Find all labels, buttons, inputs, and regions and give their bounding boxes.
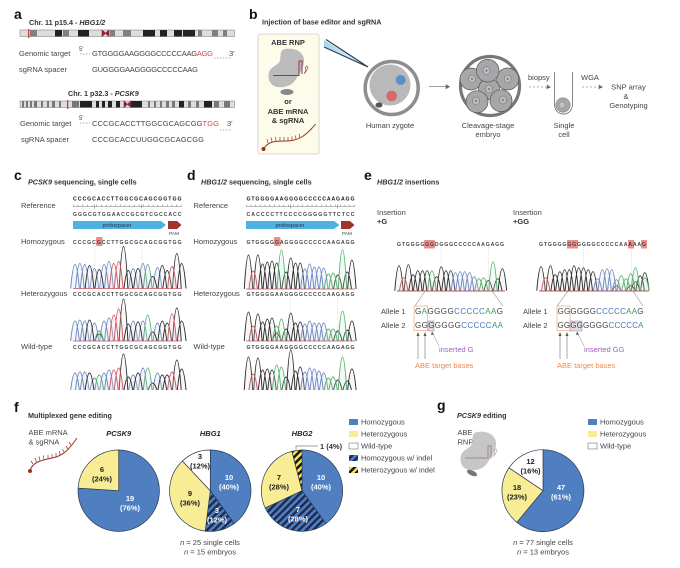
legend: f: Wild-type <box>361 442 392 450</box>
wild-type trace <box>244 345 356 390</box>
pie chart: HBG1: (40%) <box>219 482 240 492</box>
pie chart: HBG2: (28%) <box>269 482 290 492</box>
caption: f sample sizes: n = 15 embryos <box>184 548 236 556</box>
pie chart: PCSK9: PCSK9 <box>106 429 132 438</box>
text: genomic target row, HBG: GTGGGGAAGGGGCCCCCAAGAGG <box>92 49 213 58</box>
label b: b <box>249 6 258 22</box>
pie chart: PCSK9 editing: 18 <box>513 483 521 492</box>
pie chart: PCSK9: (76%) <box>120 504 141 512</box>
caption: f sample sizes: n = 25 single cells <box>180 538 240 547</box>
panel c: PCSK9 sequencing <box>14 167 186 390</box>
caption: g sample sizes: n = 77 single cells <box>513 538 573 547</box>
insertion +GG column: Insertion <box>513 208 542 217</box>
pie chart: HBG2 <box>261 429 343 531</box>
pie chart: HBG2: 7 <box>296 505 300 514</box>
heterozygous trace <box>244 292 356 341</box>
legend: g <box>588 418 647 450</box>
label e: e <box>364 167 372 183</box>
icon: human zygote <box>365 62 418 114</box>
insertion +GG column: +GG <box>513 217 529 226</box>
homozygous trace <box>244 237 356 289</box>
panel g: PCSK9 editing <box>437 397 647 556</box>
pie chart: HBG2: (40%) <box>311 482 332 492</box>
legend: f: Homozygous <box>361 418 405 426</box>
row labels: Wild-type <box>194 342 225 351</box>
row labels: Reference <box>194 201 228 210</box>
text: genomic target row, PCSK9: 5' <box>79 116 83 122</box>
row labels: Homozygous <box>21 237 65 246</box>
insertion +GG column: inserted GG <box>584 345 625 354</box>
reference sequence <box>73 196 182 218</box>
box: ABE reagents <box>258 34 319 154</box>
pie chart: HBG2: (28%) <box>288 514 309 524</box>
text: genomic target row, PCSK9: CCCGCACCTTGGCGCAGCGGTGG <box>92 119 219 128</box>
pie chart: HBG1: 3 <box>215 506 219 515</box>
pie chart: HBG2: 1 (4%) <box>320 442 343 451</box>
insertion +G column <box>377 208 507 370</box>
insertion +GG column: GTGGGGGGGGGGCCCCCAAAAAG <box>539 242 646 248</box>
wild-type trace <box>71 345 186 390</box>
PAM arrow: PAM <box>342 231 352 237</box>
pie chart: PCSK9 editing: (16%) <box>520 466 541 476</box>
insertion +GG column: GGGGGGCCCCCAAG <box>558 307 644 316</box>
icon: mRNA strand <box>262 124 316 151</box>
text: genomic target row, PCSK9: Genomic target <box>20 119 72 128</box>
protospacer arrow <box>73 221 166 229</box>
legend: f: Heterozygous <box>361 430 408 438</box>
panel a: genomic targets <box>14 6 235 144</box>
pie chart: HBG1: HBG1 <box>200 429 221 438</box>
pie chart: HBG1: 10 <box>225 473 233 482</box>
protospacer arrow <box>246 221 340 229</box>
reference sequence: GGGCGTGGAACCGCGTCGCCACC <box>73 212 182 218</box>
insertion +G column: Allele 1 <box>381 307 406 316</box>
pie chart: PCSK9 editing: (23%) <box>507 492 528 502</box>
insertion +GG column: GGGGGGGGCCCCCA <box>558 321 644 330</box>
insertion +G column: Allele 2 <box>381 321 406 330</box>
reference sequence: CCCGCACCTTGGCGCAGCGGTGG <box>73 196 182 202</box>
text: genomic target row, HBG: 3' <box>229 49 235 58</box>
PAM arrow <box>341 221 354 237</box>
chromatogram +GG <box>537 266 649 291</box>
pie chart: HBG2: HBG2 <box>292 429 313 438</box>
text: sgRNA spacer row, HBG: GUGGGGAAGGGGCCCCCAAG <box>92 65 198 74</box>
text: genomic target row, HBG: Genomic target <box>19 49 71 58</box>
heading: HBG1/2 locus: Chr. 11 p15.4 - HBG1/2 <box>29 18 105 27</box>
legend: f: Homozygous w/ indel <box>361 454 433 462</box>
caption: embryo: embryo <box>475 130 501 139</box>
insertion +G column: GGGGGGGCCCCCAA <box>415 321 504 330</box>
wild-type trace: GTGGGGAAGGGGCCCCCAAGAGG <box>246 345 354 351</box>
insertion +GG column: ABE target bases <box>557 361 616 370</box>
pie chart: HBG1: (36%) <box>180 498 201 508</box>
ideogram: chromosome 1 <box>20 100 234 109</box>
text: sgRNA spacer row, PCSK9: sgRNA spacer <box>21 135 69 144</box>
panel e: HBG1/2 insertions <box>364 167 649 370</box>
panel d: HBG1/2 sequencing <box>187 167 356 390</box>
caption: g sample sizes: n = 13 embryos <box>517 548 569 556</box>
text: sgRNA spacer row, HBG <box>19 65 198 74</box>
text: SNP array and genotyping: & <box>623 92 629 101</box>
insertion +GG column: Allele 2 <box>523 321 548 330</box>
pie chart: HBG2: 7 <box>277 473 281 482</box>
label: WGA: WGA <box>581 73 599 82</box>
icon: single cell tube <box>554 72 572 114</box>
label f: f <box>14 399 19 415</box>
icon: RNP complex <box>460 432 497 478</box>
row labels: Wild-type <box>21 342 52 351</box>
heading: PCSK9 locus: Chr. 1 p32.3 - PCSK9 <box>68 89 139 98</box>
panel f: multiplexed gene editing <box>14 399 435 556</box>
legend: f: Heterozygous w/ indel <box>361 466 435 474</box>
pie chart: PCSK9: 19 <box>126 494 134 503</box>
arrow: biopsy <box>529 85 550 89</box>
label d: d <box>187 167 196 183</box>
chromatogram +G <box>395 262 507 291</box>
icon: cleavage-stage embryo <box>460 56 520 116</box>
pie chart: HBG1 <box>170 429 251 531</box>
homozygous trace: GTGGGGGAGGGGCCCCCAAGAGG <box>246 240 354 246</box>
label g: g <box>437 397 446 413</box>
heading: PCSK9 editing <box>457 411 507 420</box>
heading: HBG1/2 insertions <box>377 178 439 186</box>
legend: g: Homozygous <box>600 418 644 426</box>
heading: Injection of base editor and sgRNA <box>262 18 381 26</box>
text: sgRNA spacer row, PCSK9 <box>21 135 204 144</box>
heterozygous trace: GTGGGGAAGGGGCCCCCAAGAGG <box>246 292 354 298</box>
text: sgRNA spacer row, PCSK9: CCCGCACCUUGGCGCAGCGG <box>92 135 204 144</box>
pie chart: HBG1: (12%) <box>190 462 211 470</box>
pie chart: HBG2: 10 <box>317 473 325 482</box>
insertion +G column: GTGGGGGGDGGGCCCCCAAGAGG <box>397 242 504 248</box>
legend: g: Wild-type <box>600 442 631 450</box>
label: biopsy: biopsy <box>528 73 550 82</box>
text: SNP array and genotyping: Genotyping <box>609 101 648 110</box>
ideogram: chromosome 11 <box>20 29 234 38</box>
row labels: Heterozygous <box>194 289 240 298</box>
pie chart: PCSK9 <box>78 429 159 531</box>
box: ABE reagents: ABE RNP <box>271 38 305 47</box>
arrow: zygote to embryo <box>429 85 450 89</box>
row labels: Heterozygous <box>21 289 68 298</box>
insertion +G column: Insertion <box>377 208 406 217</box>
text: SNP array and genotyping: SNP array <box>611 82 646 92</box>
insertion +GG column: Allele 1 <box>523 307 548 316</box>
reference sequence: CACCCCTTCCCCGGGGGTTCTCC <box>246 212 355 218</box>
text: ABE RNP: ABE <box>458 428 473 437</box>
pie chart: PCSK9 editing <box>502 450 584 532</box>
legend: g: Heterozygous <box>600 430 647 438</box>
arrow: WGA <box>582 85 602 89</box>
pie chart: PCSK9: (24%) <box>92 474 113 484</box>
text: genomic target row, HBG <box>19 47 235 58</box>
panel b: injection workflow <box>249 6 648 154</box>
pie chart: HBG1: 3 <box>198 452 202 461</box>
pie chart: PCSK9 editing: 12 <box>526 457 535 466</box>
heterozygous trace: CCCGCACCTTGGCGCAGCGGTGG <box>73 292 182 298</box>
icon: injection needle <box>324 40 368 67</box>
box: ABE reagents: or <box>284 97 292 106</box>
box: ABE reagents: & sgRNA <box>272 116 305 125</box>
PAM arrow <box>168 221 182 237</box>
text: ABE RNP: RNP <box>458 438 473 446</box>
caption: single cell: Single <box>554 121 574 130</box>
heading: HBG1/2 sequencing, single cells <box>201 178 312 186</box>
heterozygous trace <box>71 292 186 341</box>
text: genomic target row, PCSK9 <box>20 116 233 130</box>
row labels: Homozygous <box>194 237 238 246</box>
icon: mRNA strand <box>28 438 77 473</box>
text: sgRNA spacer row, HBG: sgRNA spacer <box>19 65 67 74</box>
insertion +G column: GAGGGGCCCCCAAG <box>415 307 503 316</box>
text: ABE mRNA & sgRNA: & sgRNA <box>28 438 59 446</box>
label a: a <box>14 6 22 22</box>
row labels <box>194 201 240 351</box>
pie chart: PCSK9 editing: (61%) <box>551 492 572 502</box>
reference sequence: GTGGGGAAGGGGCCCCCAAGAGG <box>246 196 354 202</box>
wild-type trace: CCCGCACCTTGGCGCAGCGGTGG <box>73 345 182 351</box>
caption: human zygote: Human zygote <box>366 121 414 130</box>
icon: RNP complex <box>268 49 308 95</box>
insertion +G column: inserted G <box>439 345 474 354</box>
protospacer arrow: protospacer <box>102 223 132 229</box>
heading: Multiplexed gene editing <box>28 411 112 420</box>
protospacer arrow: protospacer <box>275 223 305 229</box>
insertion +G column: ABE target bases <box>415 361 474 370</box>
legend: f <box>349 418 435 474</box>
row labels: Reference <box>21 201 56 210</box>
pie chart: HBG1: (12%) <box>207 516 228 524</box>
label c: c <box>14 167 22 183</box>
homozygous trace: CCCGCGCCTTGGCGCAGCGGTGG <box>73 240 182 246</box>
text: ABE mRNA & sgRNA: ABE mRNA <box>28 428 68 437</box>
insertion +GG column <box>513 208 649 370</box>
text: genomic target row, PCSK9: 3' <box>227 119 233 128</box>
pie chart: PCSK9: 6 <box>100 465 104 474</box>
box: ABE reagents: ABE mRNA <box>268 107 309 116</box>
reference sequence <box>246 196 355 218</box>
row labels <box>21 201 68 351</box>
homozygous trace <box>71 237 186 288</box>
PAM arrow: PAM <box>169 231 179 237</box>
caption: single cell: cell <box>558 130 570 139</box>
pie chart: PCSK9 editing: 47 <box>557 483 565 492</box>
insertion +G column: +G <box>377 217 387 226</box>
heading: PCSK9 sequencing, single cells <box>28 178 137 186</box>
text: genomic target row, HBG: 5' <box>79 47 83 53</box>
caption: embryo: Cleavage-stage <box>462 121 514 130</box>
pie chart: HBG1: 9 <box>188 489 192 498</box>
